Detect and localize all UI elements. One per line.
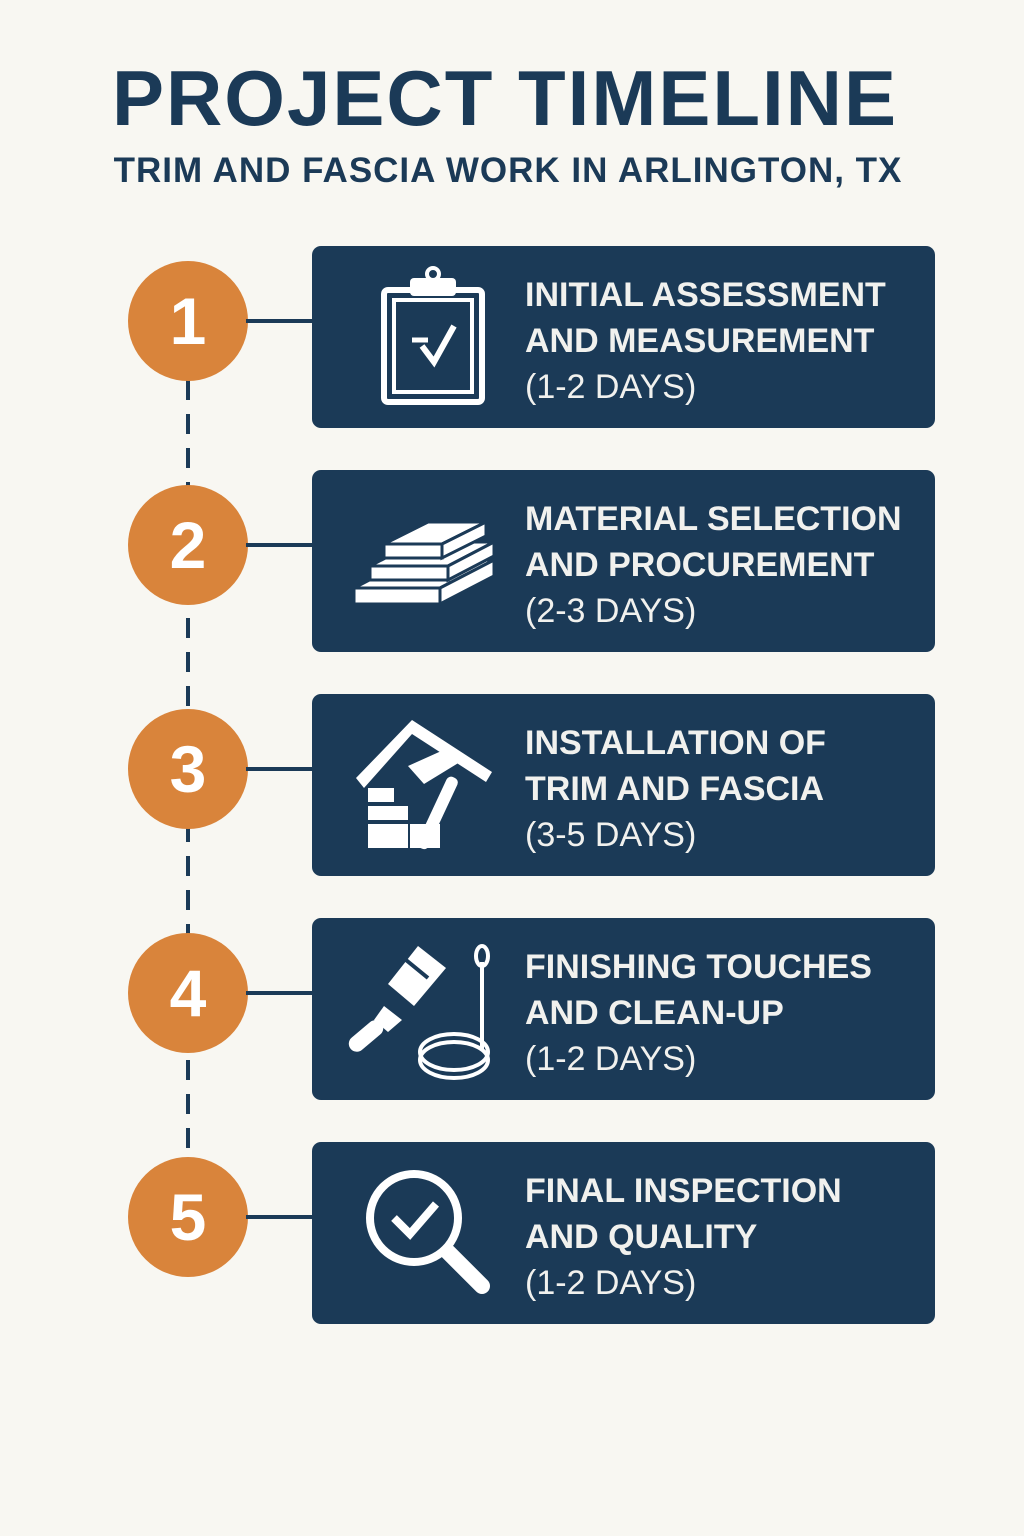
icon: paintbrush and caulk bbox=[348, 944, 490, 1080]
card 2 bbox=[312, 470, 935, 652]
text: AND PROCUREMENT bbox=[525, 546, 874, 584]
step 3 circle: 3 bbox=[170, 732, 206, 806]
subtitle: TRIM AND FASCIA WORK IN ARLINGTON, TX bbox=[114, 151, 902, 190]
text: FINISHING TOUCHES bbox=[525, 948, 872, 986]
text bbox=[525, 276, 886, 406]
text bbox=[525, 948, 872, 1078]
step 1 circle: 1 bbox=[170, 284, 206, 358]
text: AND CLEAN-UP bbox=[525, 994, 784, 1032]
text: AND MEASUREMENT bbox=[525, 322, 874, 360]
card 3 bbox=[312, 694, 935, 876]
connector 4 bbox=[246, 991, 314, 995]
step 4 circle: 4 bbox=[170, 956, 206, 1030]
text: FINAL INSPECTION bbox=[525, 1172, 842, 1210]
text bbox=[525, 724, 826, 854]
icon: lumber stack bbox=[356, 524, 492, 602]
text bbox=[525, 500, 902, 630]
dashed timeline line bbox=[186, 380, 190, 1148]
step 1 circle bbox=[128, 261, 248, 381]
step 3 circle bbox=[128, 709, 248, 829]
text: (1-2 DAYS) bbox=[525, 1264, 696, 1302]
text: INITIAL ASSESSMENT bbox=[525, 276, 886, 314]
step 5 circle bbox=[128, 1157, 248, 1277]
card 1 bbox=[312, 246, 935, 428]
text: TRIM AND FASCIA bbox=[525, 770, 824, 808]
text: (3-5 DAYS) bbox=[525, 816, 696, 854]
title: PROJECT TIMELINE bbox=[112, 54, 898, 142]
icon: clipboard bbox=[381, 266, 485, 405]
connector 3 bbox=[246, 767, 314, 771]
text bbox=[525, 1172, 842, 1302]
step 2 circle: 2 bbox=[170, 508, 206, 582]
connector 2 bbox=[246, 543, 314, 547]
text: (2-3 DAYS) bbox=[525, 592, 696, 630]
icon: magnifier with check bbox=[366, 1170, 490, 1294]
icon: house and hammer bbox=[356, 720, 492, 850]
text: (1-2 DAYS) bbox=[525, 1040, 696, 1078]
text: MATERIAL SELECTION bbox=[525, 500, 902, 538]
text: INSTALLATION OF bbox=[525, 724, 826, 762]
card 5 bbox=[312, 1142, 935, 1324]
step 5 circle: 5 bbox=[170, 1180, 206, 1254]
connector 1 bbox=[246, 319, 314, 323]
connector 5 bbox=[246, 1215, 314, 1219]
text: (1-2 DAYS) bbox=[525, 368, 696, 406]
step 4 circle bbox=[128, 933, 248, 1053]
text: AND QUALITY bbox=[525, 1218, 757, 1256]
card 4 bbox=[312, 918, 935, 1100]
step 2 circle bbox=[128, 485, 248, 605]
